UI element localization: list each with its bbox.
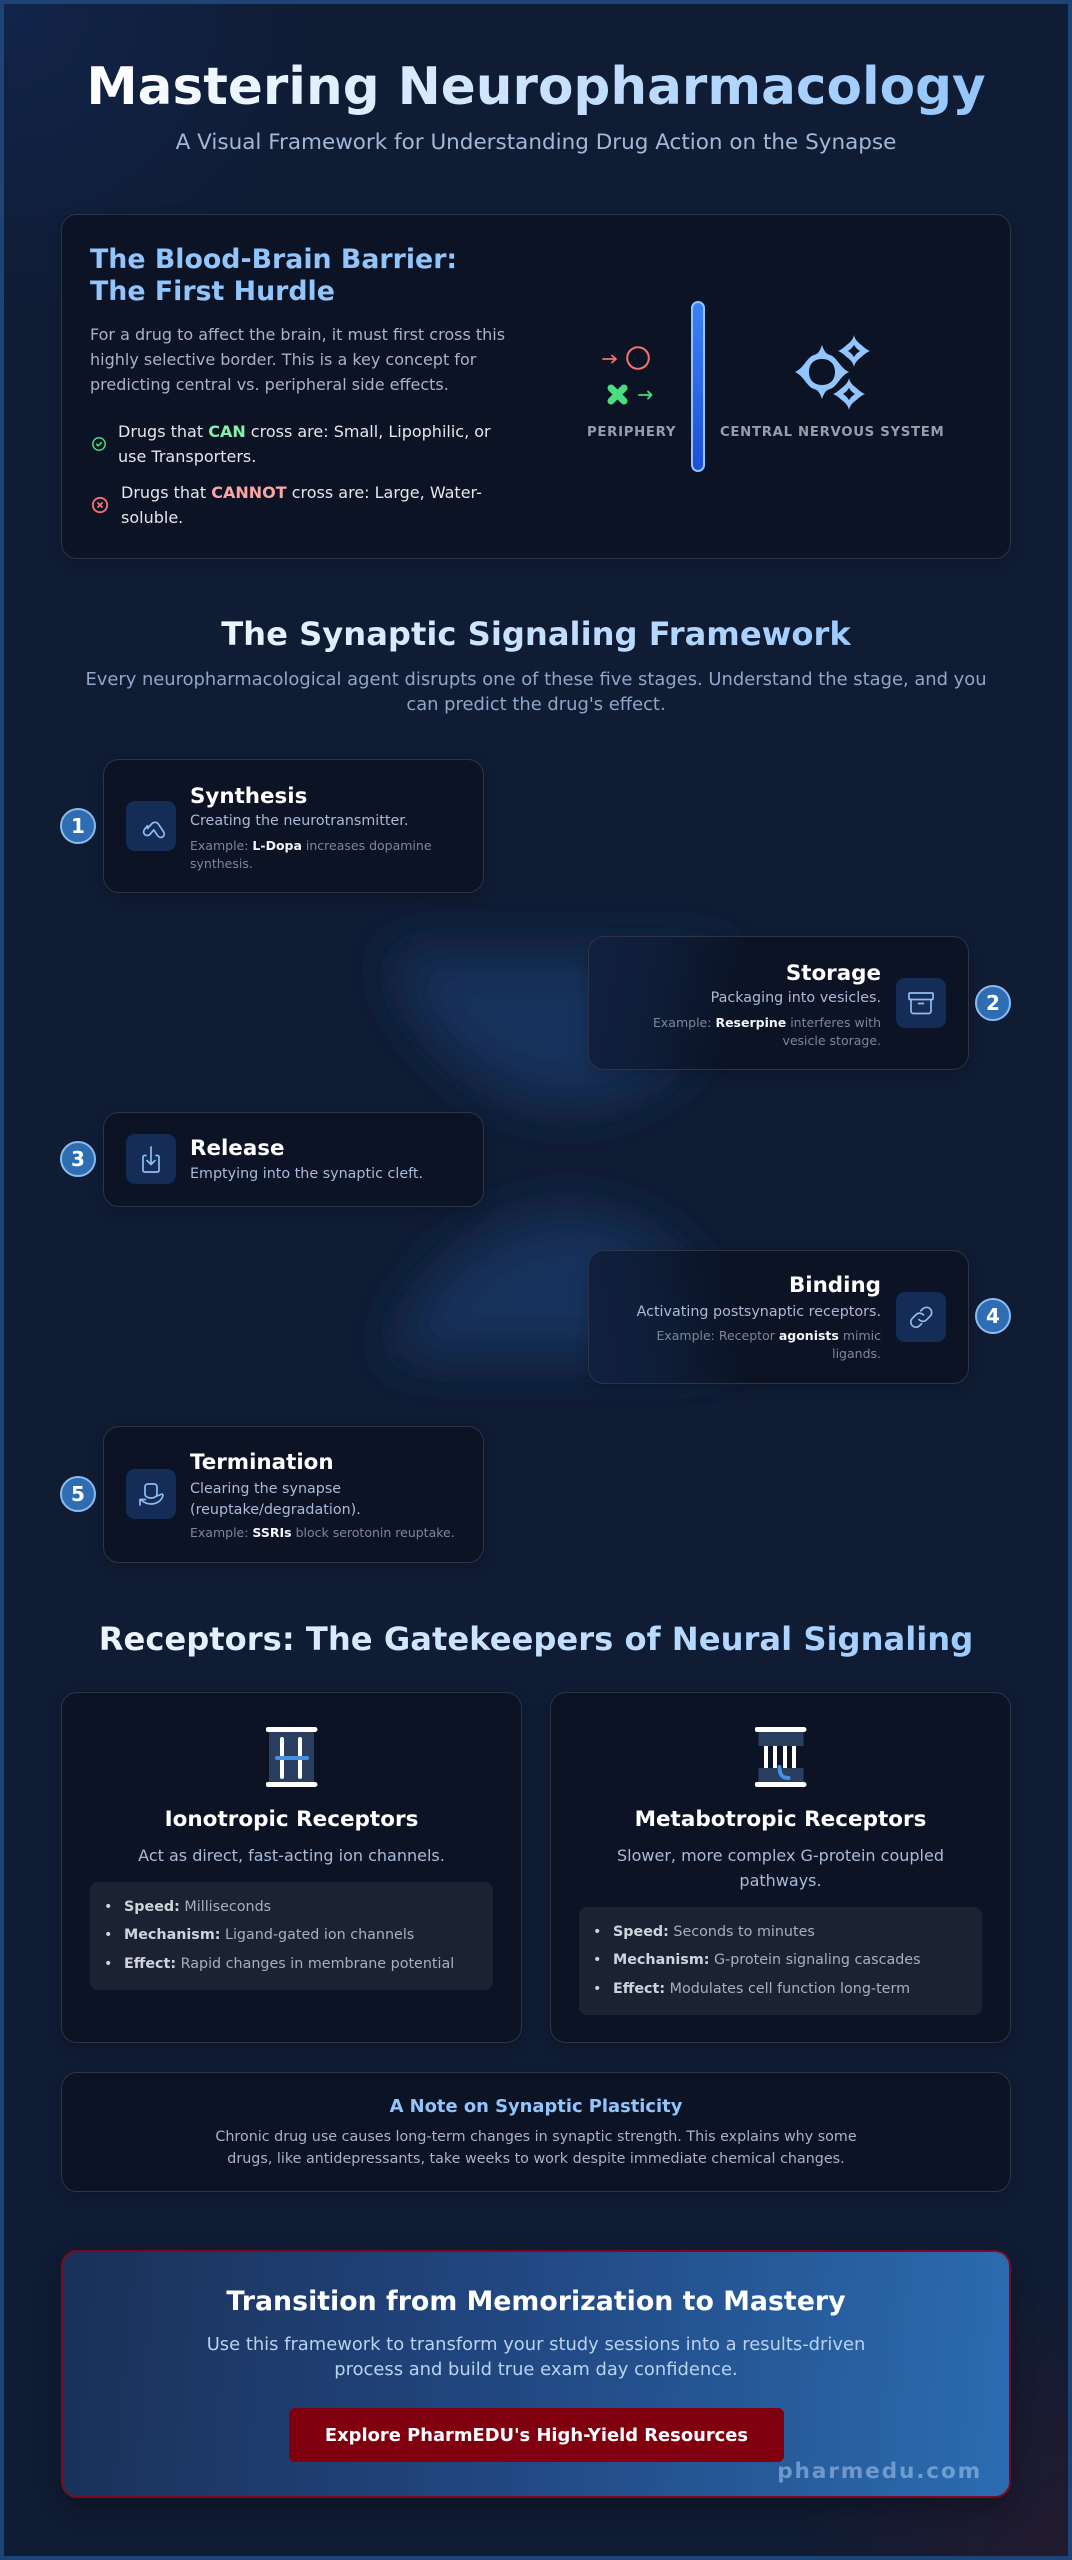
watermark: pharmedu.com bbox=[777, 2459, 982, 2484]
description: Emptying into the synaptic cleft. bbox=[190, 1166, 423, 1182]
item: effect: Effect: Rapid changes in membrane potential bbox=[124, 1956, 454, 1972]
step 3: release bbox=[60, 1112, 484, 1207]
description: Slower, more complex G-protein coupled bbox=[617, 1846, 944, 1865]
panel: metabotropic receptors bbox=[550, 1692, 1011, 2043]
step 2: storage bbox=[587, 936, 1011, 1074]
icon: check circle bbox=[92, 437, 106, 451]
item: mechanism: Mechanism: Ligand-gated ion channels bbox=[124, 1927, 414, 1943]
title: Synthesis bbox=[190, 784, 307, 809]
icon: chain link bbox=[896, 1292, 946, 1342]
cta text: Use this framework to transform your study sessions into a results-driven bbox=[207, 2334, 865, 2355]
text: drugs that can cross: use Transporters. bbox=[118, 447, 256, 466]
list: properties bbox=[579, 1907, 982, 2015]
text: framework intro bbox=[85, 669, 987, 714]
note text: drugs, like antidepressants, take weeks to work despite immediate chemical changes. bbox=[227, 2150, 845, 2166]
number 1: 1 bbox=[71, 814, 85, 838]
title: Metabotropic Receptors bbox=[635, 1807, 926, 1832]
title: Storage bbox=[786, 961, 881, 986]
text: drugs that cannot cross bbox=[121, 483, 482, 527]
list: properties: • bbox=[104, 1956, 112, 1972]
description: Activating postsynaptic receptors. bbox=[637, 1304, 881, 1320]
text: barrier description: For a drug to affect the brain, it must first cross this bbox=[90, 325, 505, 344]
list: properties bbox=[90, 1882, 493, 1990]
number 2: 2 bbox=[986, 991, 1000, 1015]
item: speed: Speed: Milliseconds bbox=[124, 1899, 271, 1915]
icon: metabotropic channel bbox=[755, 1727, 806, 1787]
description: Act as direct, fast-acting ion channels. bbox=[138, 1846, 445, 1864]
icon: storage box bbox=[896, 978, 946, 1028]
button bbox=[289, 2408, 784, 2462]
icon: ionotropic channel bbox=[266, 1727, 318, 1787]
text: barrier description: highly selective border. This is a key concept for bbox=[90, 350, 476, 369]
heading: blood-brain barrier: The First Hurdle bbox=[90, 276, 335, 307]
number 3 bbox=[60, 1141, 96, 1177]
number 1 bbox=[60, 808, 96, 844]
number 5 bbox=[60, 1476, 96, 1512]
note title: A Note on Synaptic Plasticity bbox=[390, 2096, 682, 2116]
item: effect: Effect: Modulates cell function long-term bbox=[613, 1981, 910, 1997]
description: Clearing the synapse bbox=[190, 1480, 341, 1496]
description bbox=[190, 1480, 361, 1518]
heading: blood-brain barrier: The Blood-Brain Barrier: bbox=[90, 244, 457, 275]
example bbox=[653, 1014, 881, 1048]
panel: blood-brain barrier bbox=[61, 214, 1011, 559]
example: Example: Receptor agonists mimic bbox=[656, 1328, 881, 1343]
diagram: periphery molecules bbox=[602, 346, 652, 404]
button: Explore PharmEDU's High-Yield Resources bbox=[325, 2425, 748, 2446]
label: central nervous system: CENTRAL NERVOUS SYSTEM bbox=[720, 425, 944, 440]
icon: x circle bbox=[92, 496, 108, 514]
cta title: Transition from Memorization to Mastery bbox=[226, 2286, 846, 2316]
description: Packaging into vesicles. bbox=[711, 990, 881, 1006]
step 4: binding bbox=[587, 1250, 1011, 1384]
example: vesicle storage. bbox=[782, 1032, 881, 1048]
heading: blood-brain barrier bbox=[90, 244, 457, 307]
title: Release bbox=[190, 1136, 284, 1161]
icon: release bbox=[126, 1134, 176, 1184]
list: properties: • bbox=[593, 1924, 601, 1940]
text: barrier description bbox=[90, 325, 505, 394]
panel: synaptic plasticity note bbox=[61, 2072, 1011, 2192]
card bbox=[588, 936, 969, 1070]
heading: receptors: Receptors: The Gatekeepers of Neural Signaling bbox=[99, 1620, 973, 1658]
card bbox=[588, 1250, 969, 1384]
title: Ionotropic Receptors bbox=[165, 1807, 418, 1832]
subtitle: A Visual Framework for Understanding Drug Action on the Synapse bbox=[176, 130, 896, 155]
label: periphery: PERIPHERY bbox=[587, 425, 676, 440]
example bbox=[190, 838, 432, 871]
description bbox=[617, 1846, 944, 1890]
example bbox=[656, 1328, 881, 1361]
icon: CNS sparkles bbox=[795, 335, 870, 410]
card bbox=[103, 759, 484, 893]
cta text: process and build true exam day confidence. bbox=[334, 2359, 738, 2380]
step 1: synthesis bbox=[60, 759, 484, 893]
barrier bar bbox=[691, 301, 705, 472]
description: pathways. bbox=[739, 1871, 822, 1890]
text: barrier description: predicting central vs. peripheral side effects. bbox=[90, 375, 449, 394]
panel: ionotropic receptors bbox=[61, 1692, 522, 2043]
text: framework intro: can predict the drug's effect. bbox=[406, 694, 666, 714]
icon: termination bbox=[126, 1469, 176, 1519]
number 2 bbox=[975, 985, 1011, 1021]
title: Termination bbox=[190, 1450, 334, 1475]
list: properties: • bbox=[104, 1899, 112, 1915]
card bbox=[103, 1112, 484, 1207]
number 3: 3 bbox=[71, 1147, 85, 1171]
icon: synthesis bbox=[126, 801, 176, 851]
note text bbox=[215, 2129, 857, 2166]
example: Example: L-Dopa increases dopamine bbox=[190, 838, 432, 853]
text: drugs that cannot cross: soluble. bbox=[121, 508, 183, 527]
step 5: termination bbox=[60, 1426, 484, 1563]
description: Creating the neurotransmitter. bbox=[190, 813, 408, 829]
number 4: 4 bbox=[986, 1304, 1000, 1328]
example: Example: SSRIs block serotonin reuptake. bbox=[190, 1525, 455, 1540]
number 5: 5 bbox=[71, 1482, 85, 1506]
list: properties: • bbox=[593, 1981, 601, 1997]
list: properties: • bbox=[593, 1952, 601, 1968]
example: ligands. bbox=[832, 1346, 881, 1361]
example: synthesis. bbox=[190, 856, 253, 871]
text: framework intro: Every neuropharmacological agent disrupts one of these five stages. Understand the stage, and you bbox=[85, 669, 987, 690]
note text: Chronic drug use causes long-term changes in synaptic strength. This explains why some bbox=[215, 2129, 857, 2145]
description: (reuptake/degradation). bbox=[190, 1502, 361, 1518]
example: Example: Reserpine interferes with bbox=[653, 1014, 881, 1030]
panel: call to action bbox=[61, 2250, 1011, 2498]
text: drugs that can cross: Drugs that CAN cross are: Small, Lipophilic, or bbox=[118, 422, 491, 441]
title: Mastering Neuropharmacology bbox=[86, 57, 986, 117]
title: Binding bbox=[789, 1273, 881, 1298]
item: mechanism: Mechanism: G-protein signaling cascades bbox=[613, 1952, 921, 1968]
item: speed: Speed: Seconds to minutes bbox=[613, 1924, 815, 1940]
list: properties: • bbox=[104, 1927, 112, 1943]
text: drugs that can cross bbox=[118, 422, 491, 466]
text: drugs that cannot cross: Drugs that CANNOT cross are: Large, Water- bbox=[121, 483, 482, 502]
cta text bbox=[207, 2334, 865, 2380]
number 4 bbox=[975, 1298, 1011, 1334]
heading: synaptic signaling framework: The Synaptic Signaling Framework bbox=[221, 614, 851, 652]
card bbox=[103, 1426, 484, 1563]
